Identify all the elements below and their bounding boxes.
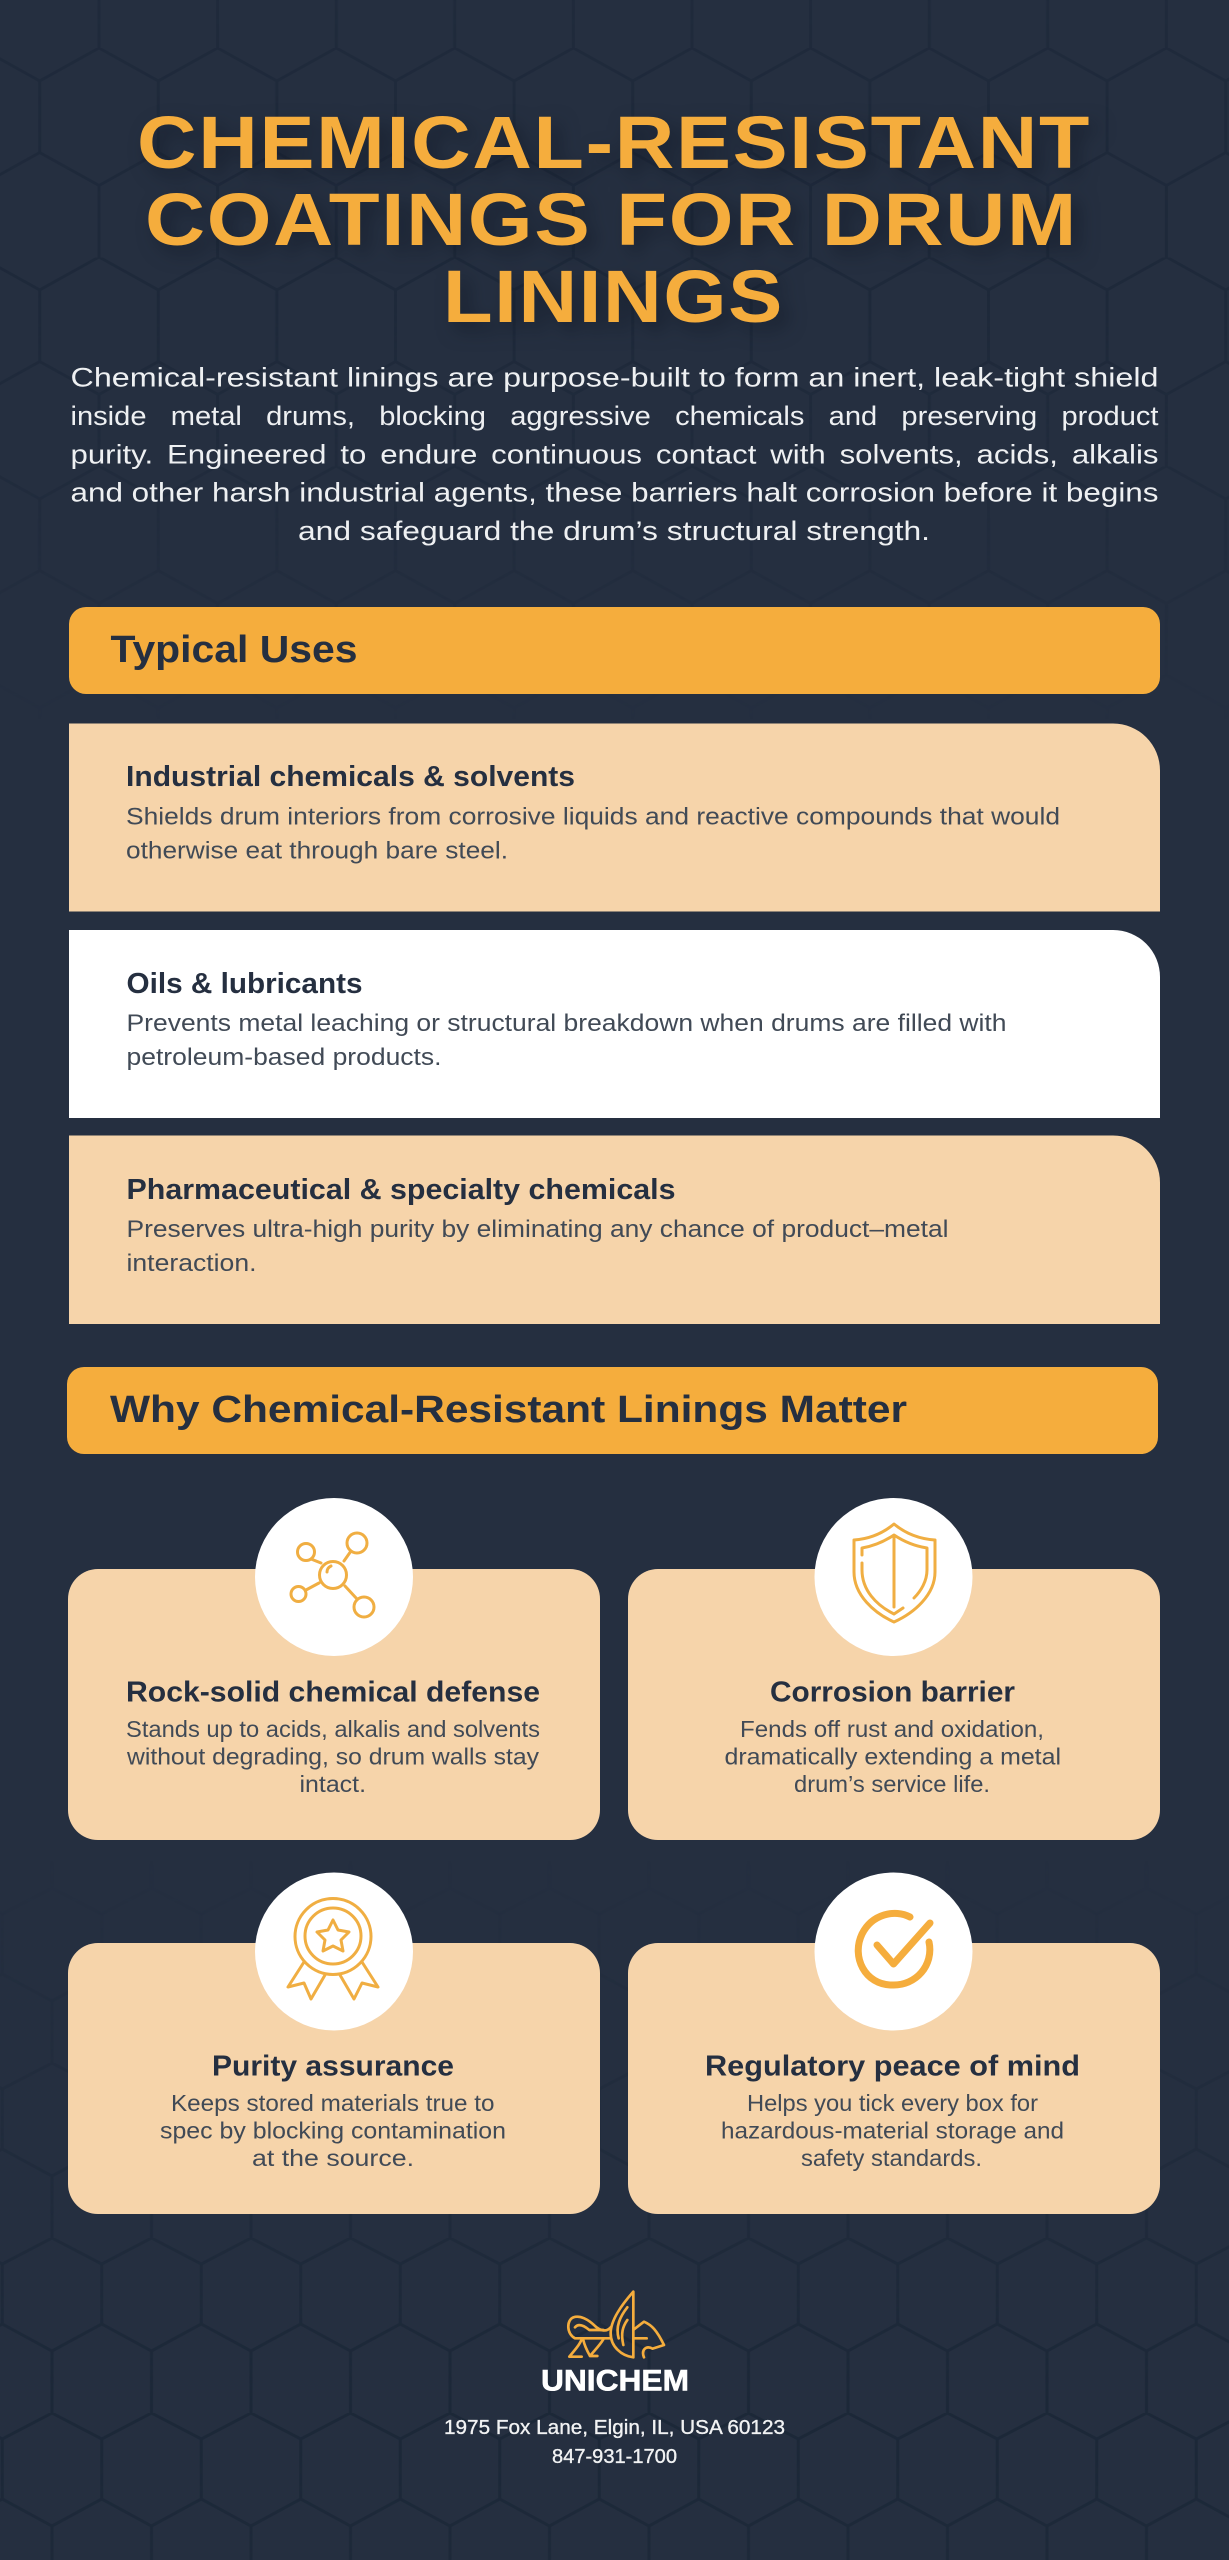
card description: hazardous-material storage and (721, 2118, 1064, 2144)
card description: Preserves ultra-high purity by eliminating any chance of product–metal (126, 1216, 948, 1243)
card heading: Corrosion barrier (770, 1676, 1015, 1708)
panel: purity assurance (68, 1872, 600, 2214)
card description: Stands up to acids, alkalis and solvents (126, 1716, 540, 1742)
heading bar: why linings matter: Why Chemical-Resistant Linings Matter (110, 1389, 907, 1431)
heading bar: typical uses: Typical Uses (110, 629, 358, 671)
card description: intact. (300, 1771, 366, 1797)
panel: industrial chemicals and solvents (69, 724, 1160, 912)
card description (160, 2090, 506, 2171)
card description: Helps you tick every box for (747, 2090, 1038, 2116)
card description: petroleum-based products. (126, 1044, 441, 1071)
card description (126, 1010, 1006, 1071)
card description: otherwise eat through bare steel. (126, 838, 508, 864)
panel: corrosion barrier (628, 1498, 1160, 1840)
card description: Fends off rust and oxidation, (740, 1716, 1044, 1742)
intro paragraph (70, 362, 1159, 546)
heading bar: typical uses (69, 607, 1160, 694)
icon: check mark (858, 1913, 930, 1985)
panel: pharmaceutical and specialty chemicals (69, 1136, 1160, 1324)
card heading: Purity assurance (212, 2050, 454, 2082)
icon circle (255, 1872, 413, 2030)
card heading: Rock-solid chemical defense (126, 1676, 540, 1708)
intro paragraph: Chemical-resistant linings are purpose-built to form an inert, leak-tight shield (70, 362, 1158, 392)
card description: drum’s service life. (794, 1771, 990, 1797)
icon: shield (854, 1524, 935, 1622)
card description (126, 804, 1060, 864)
card description: Shields drum interiors from corrosive liquids and reactive compounds that would (126, 804, 1060, 830)
card description: Keeps stored materials true to (171, 2090, 494, 2116)
intro paragraph: inside metal drums, blocking aggressive chemicals and preserving product (70, 401, 1159, 431)
panel: oils and lubricants (69, 930, 1160, 1118)
card description: spec by blocking contamination (160, 2118, 506, 2144)
card heading: Regulatory peace of mind (705, 2050, 1080, 2082)
card description: at the source. (252, 2145, 414, 2171)
card description: Prevents metal leaching or structural breakdown when drums are filled with (126, 1010, 1006, 1037)
title: COATINGS FOR DRUM (145, 178, 1078, 261)
footer logo (541, 2292, 689, 2398)
card description: interaction. (126, 1250, 256, 1277)
footer contact: 1975 Fox Lane, Elgin, IL, USA 60123 (444, 2417, 785, 2439)
panel: rock-solid chemical defense (68, 1498, 600, 1840)
footer contact: 847-931-1700 (552, 2446, 677, 2468)
card description (126, 1716, 540, 1797)
heading bar: why linings matter (67, 1367, 1158, 1454)
card description: safety standards. (801, 2145, 982, 2171)
title: CHEMICAL-RESISTANT (137, 101, 1091, 184)
intro paragraph: and safeguard the drum’s structural strength. (298, 516, 930, 546)
icon circle (814, 1872, 972, 2030)
footer contact (444, 2417, 785, 2468)
intro paragraph: purity. Engineered to endure continuous contact with solvents, acids, alkalis (70, 440, 1158, 470)
card description: without degrading, so drum walls stay (126, 1744, 540, 1770)
card description (126, 1216, 948, 1277)
icon circle (814, 1498, 972, 1656)
company name: UNICHEM (541, 2364, 689, 2398)
card heading: Oils & lubricants (126, 968, 362, 1000)
icon: griffin (568, 2292, 664, 2357)
title (137, 101, 1091, 338)
icon: award rosette (288, 1898, 378, 1999)
card description: dramatically extending a metal (724, 1744, 1061, 1770)
card description (721, 2090, 1064, 2171)
panel: regulatory peace of mind (628, 1872, 1160, 2214)
title: LININGS (443, 255, 784, 338)
icon circle (255, 1498, 413, 1656)
card heading: Industrial chemicals & solvents (126, 761, 575, 793)
intro paragraph: and other harsh industrial agents, these barriers halt corrosion before it begins (70, 478, 1158, 508)
icon: molecule (291, 1533, 374, 1617)
card heading: Pharmaceutical & specialty chemicals (126, 1174, 676, 1206)
card description (724, 1716, 1061, 1797)
